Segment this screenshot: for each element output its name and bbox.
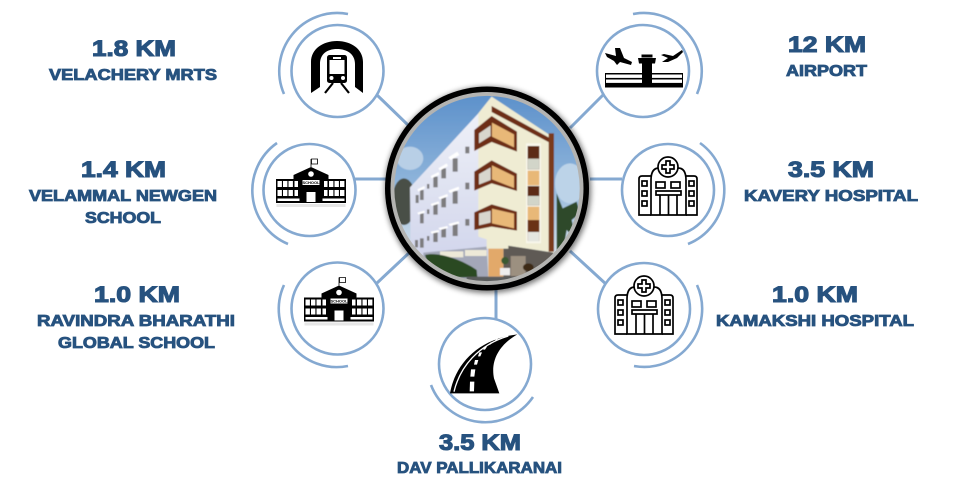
label: Velachery MRTS: VELACHERY MRTS [49, 67, 217, 84]
node: Velachery MRTS [279, 13, 384, 117]
top band and column [492, 106, 553, 145]
label: Kavery Hospital: KAVERY HOSPITAL [744, 188, 918, 205]
stair column [526, 143, 541, 243]
label: Kamakshi Hospital: KAMAKSHI HOSPITAL [716, 313, 914, 330]
node: Airport [597, 13, 702, 117]
label: Airport: 12 KM [788, 32, 866, 57]
label: Kavery Hospital [744, 157, 918, 205]
ground floor [423, 247, 488, 280]
node: Kavery Hospital [622, 143, 724, 244]
label: DAV Pallikaranai: 3.5 KM [439, 430, 521, 455]
icon: hospital [615, 276, 673, 334]
label: Ravindra Bharathi Global School: RAVINDRA BHARATHI [37, 313, 235, 330]
side windows [415, 147, 469, 248]
icon: hospital [639, 157, 697, 215]
label: Ravindra Bharathi Global School: 1.0 KM [94, 282, 180, 307]
label: DAV Pallikaranai [397, 430, 562, 477]
label: Kamakshi Hospital [716, 282, 914, 330]
node: DAV Pallikaranai [431, 318, 533, 422]
label: Velammal Newgen School: SCHOOL [85, 210, 161, 227]
label: Velammal Newgen School [29, 157, 217, 227]
node: Kamakshi Hospital [598, 263, 702, 367]
icon: road [450, 334, 517, 393]
node: Velammal Newgen School [252, 143, 356, 244]
label: Velammal Newgen School: VELAMMAL NEWGEN [29, 188, 217, 205]
label: Airport: AIRPORT [786, 63, 868, 80]
icon: airport tower and planes [605, 48, 683, 88]
icon: school building: SCHOOL [330, 298, 348, 304]
central building photo [385, 86, 591, 293]
bay windows [474, 116, 517, 152]
label: Ravindra Bharathi Global School: GLOBAL SCHOOL [58, 335, 215, 352]
icon: school building: SCHOOL [302, 180, 320, 185]
label: Kavery Hospital: 3.5 KM [788, 157, 874, 182]
connector lines [355, 95, 622, 320]
node: Ravindra Bharathi Global School [279, 262, 384, 367]
label: Airport [786, 32, 868, 80]
label: Kamakshi Hospital: 1.0 KM [772, 282, 858, 307]
label: Velammal Newgen School: 1.4 KM [81, 157, 166, 182]
icon: metro train [311, 41, 363, 93]
label: Ravindra Bharathi Global School [37, 282, 235, 352]
label: DAV Pallikaranai: DAV PALLIKARANAI [397, 460, 562, 477]
label: Velachery MRTS: 1.8 KM [92, 36, 176, 61]
label: Velachery MRTS [49, 36, 217, 84]
